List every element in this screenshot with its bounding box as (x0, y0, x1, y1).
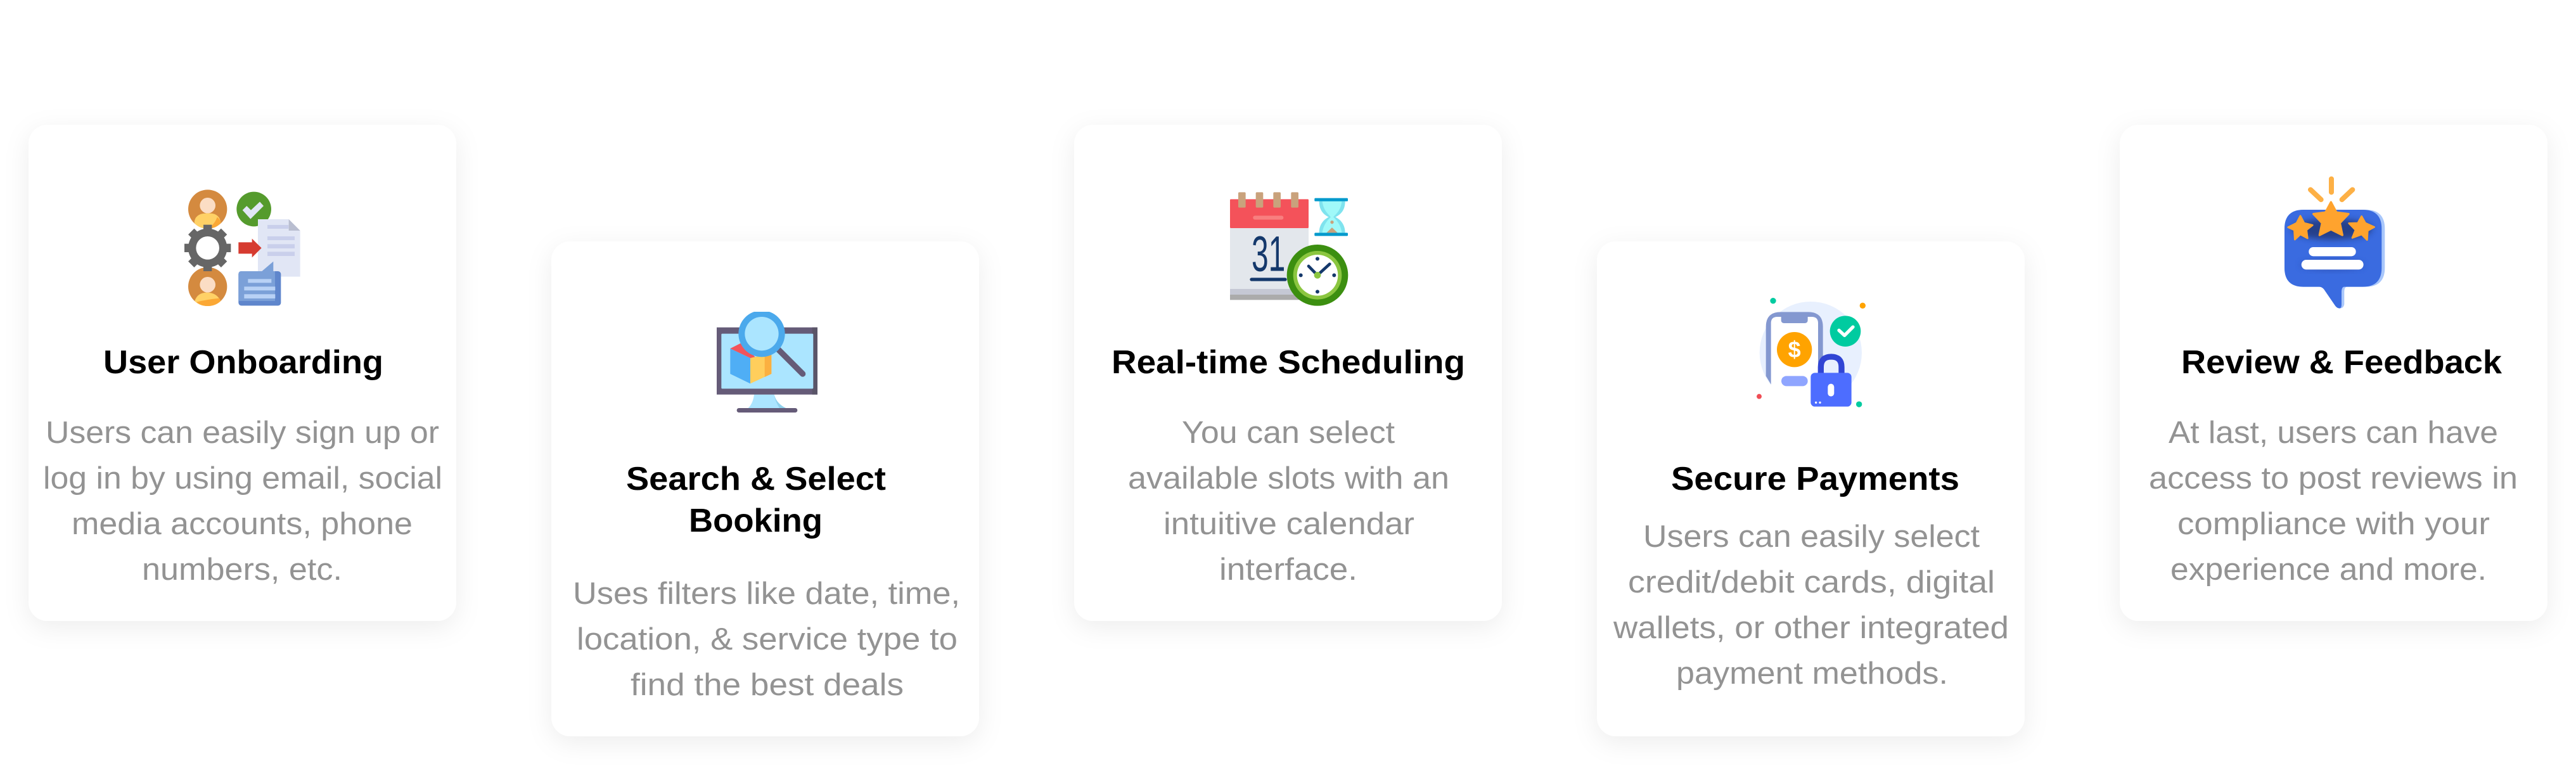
panel: Secure Payments (1597, 241, 2025, 736)
description (1613, 520, 2009, 691)
card background (29, 125, 456, 621)
icon: speech bubble with stars (2284, 179, 2385, 309)
description: At last, users can have (2169, 416, 2498, 450)
icon: calendar, hourglass and clock: 31 (1252, 226, 1285, 282)
card background (2120, 125, 2547, 621)
description (573, 577, 960, 702)
description: media accounts, phone (72, 507, 413, 541)
description: Users can easily select (1643, 520, 1980, 554)
description: compliance with your (2177, 507, 2490, 541)
description: Users can easily sign up or (46, 416, 439, 450)
description: You can select (1182, 416, 1395, 450)
description: interface. (1219, 553, 1357, 587)
heading: User Onboarding (103, 344, 383, 381)
description (1128, 416, 1449, 587)
heading: Review & Feedback (2181, 344, 2502, 381)
description: find the best deals (631, 668, 904, 702)
heading: Search & Select (626, 461, 886, 497)
heading: Booking (689, 502, 823, 539)
description: Uses filters like date, time, (573, 577, 960, 611)
description: available slots with an (1128, 461, 1449, 496)
heading (626, 461, 886, 539)
description (2149, 416, 2518, 587)
card background (1597, 241, 2025, 736)
panel: Real-time Scheduling (1074, 125, 1502, 621)
card background (1074, 125, 1502, 621)
description: access to post reviews in (2149, 461, 2518, 496)
description: intuitive calendar (1163, 507, 1414, 541)
description: numbers, etc. (142, 553, 342, 587)
icon: phone payment and padlock (1757, 298, 1866, 407)
heading: Real-time Scheduling (1112, 344, 1465, 381)
description (43, 416, 442, 587)
description: location, & service type to (577, 622, 958, 656)
description: experience and more. (2170, 553, 2487, 587)
icon: phone payment and padlock: $ (1788, 336, 1801, 362)
card background (551, 241, 979, 736)
icon: users, gear, document and chat (184, 189, 300, 306)
description: payment methods. (1676, 656, 1948, 691)
description: log in by using email, social (43, 461, 442, 496)
heading: Secure Payments (1671, 461, 1959, 497)
icon: monitor with magnifier and box (717, 310, 817, 413)
description: credit/debit cards, digital (1628, 565, 1995, 599)
panel: Search & Select Booking (551, 241, 979, 736)
icon: calendar, hourglass and clock (1230, 192, 1348, 306)
panel: User Onboarding (29, 125, 456, 621)
panel: Review & Feedback (2120, 125, 2547, 621)
description: wallets, or other integrated (1613, 611, 2009, 645)
